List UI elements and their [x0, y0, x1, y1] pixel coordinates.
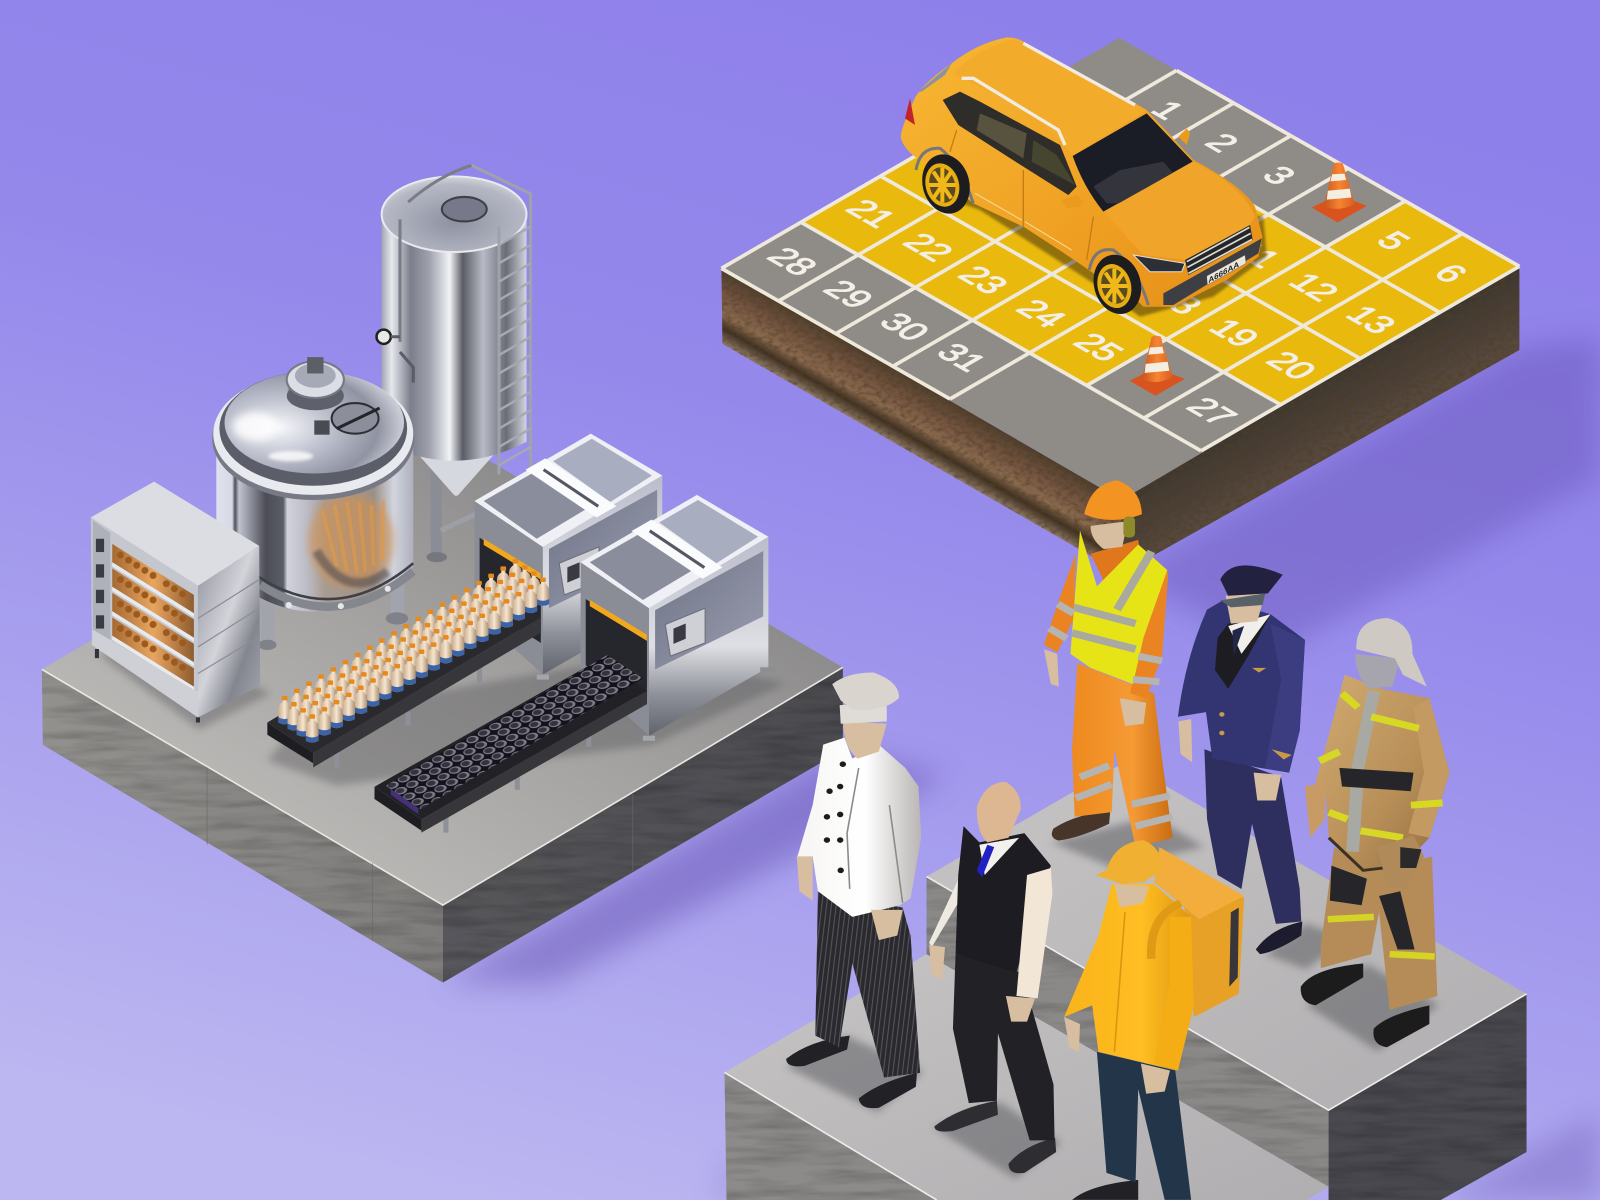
bay numbers: 28: [759, 243, 825, 281]
people, traced in crop coordinates: [786, 480, 1449, 1200]
bay numbers: 31: [928, 339, 994, 377]
bay numbers: 20: [1258, 347, 1324, 385]
upper step top: [927, 762, 1527, 1110]
tall fermentation tank: [377, 165, 531, 562]
soil right face: [1121, 266, 1519, 573]
panel: parking lot on soil block: [721, 37, 1519, 573]
bay numbers: 11: [1224, 236, 1288, 273]
jar machine: [581, 495, 776, 741]
icon: traffic cone by bay 25: [1130, 336, 1185, 396]
upper step front-left face: [927, 877, 1329, 1187]
panel: food factory platform: [42, 165, 843, 983]
yellow painted bays: [801, 84, 1519, 405]
yellow SUV: А666АА: [1208, 259, 1239, 285]
bottle machine: [474, 434, 669, 680]
concrete top: [42, 434, 843, 905]
bay numbers: [759, 96, 1475, 431]
bay numbers: 21: [837, 195, 904, 233]
figure contact shadows: [786, 816, 1439, 1179]
traffic cones, traced in crop coordinates: [1130, 163, 1367, 396]
bottle conveyor: [267, 559, 549, 768]
upper step right face: [1329, 994, 1527, 1200]
white grid lines: [721, 70, 1519, 451]
figure: pilot: [1178, 565, 1305, 954]
bay numbers: 1: [1142, 96, 1192, 125]
oven base plate: [92, 630, 198, 717]
bay numbers: 3: [1254, 161, 1303, 190]
bay numbers: 23: [949, 261, 1016, 299]
bay numbers: 27: [1178, 393, 1244, 431]
bay numbers: 2: [1197, 129, 1246, 157]
bay numbers: 18: [1143, 281, 1210, 320]
bay numbers: 29: [815, 275, 881, 314]
asphalt surface: [721, 38, 1519, 500]
car shadow: [923, 190, 1267, 317]
deck oven: [91, 482, 260, 722]
figure: courier with backpack: [1064, 840, 1244, 1200]
yellow SUV: [901, 37, 1262, 319]
oven shelves: [112, 544, 194, 691]
lower step left face: [724, 1072, 937, 1200]
figure: chef: [786, 672, 921, 1108]
bay numbers: 24: [1008, 295, 1074, 333]
panel: stepped plinth: [724, 762, 1527, 1200]
machine contact shadows: [97, 653, 786, 786]
figure: road worker: [1044, 480, 1173, 847]
bay numbers: 13: [1337, 301, 1404, 339]
concrete right face: [443, 667, 843, 983]
concrete left face: [42, 669, 443, 983]
soil left face: [721, 268, 1121, 573]
bay numbers: 12: [1280, 268, 1346, 307]
bay numbers: 19: [1200, 314, 1267, 352]
stainless kettle: [212, 357, 414, 650]
lower step top: [724, 954, 1329, 1200]
bay numbers: 6: [1425, 259, 1475, 288]
bay numbers: 25: [1065, 328, 1131, 367]
figure: waiter: [929, 782, 1056, 1173]
jar conveyor: [374, 655, 647, 833]
icon: traffic cone by bay 3: [1312, 163, 1367, 223]
car traced in crop coordinates: [901, 37, 1267, 319]
bay numbers: 22: [894, 228, 961, 267]
figure: firefighter: [1301, 618, 1449, 1047]
cast shadows: [443, 337, 1600, 1200]
bay numbers: 30: [871, 308, 937, 346]
bay numbers: 5: [1368, 227, 1418, 255]
